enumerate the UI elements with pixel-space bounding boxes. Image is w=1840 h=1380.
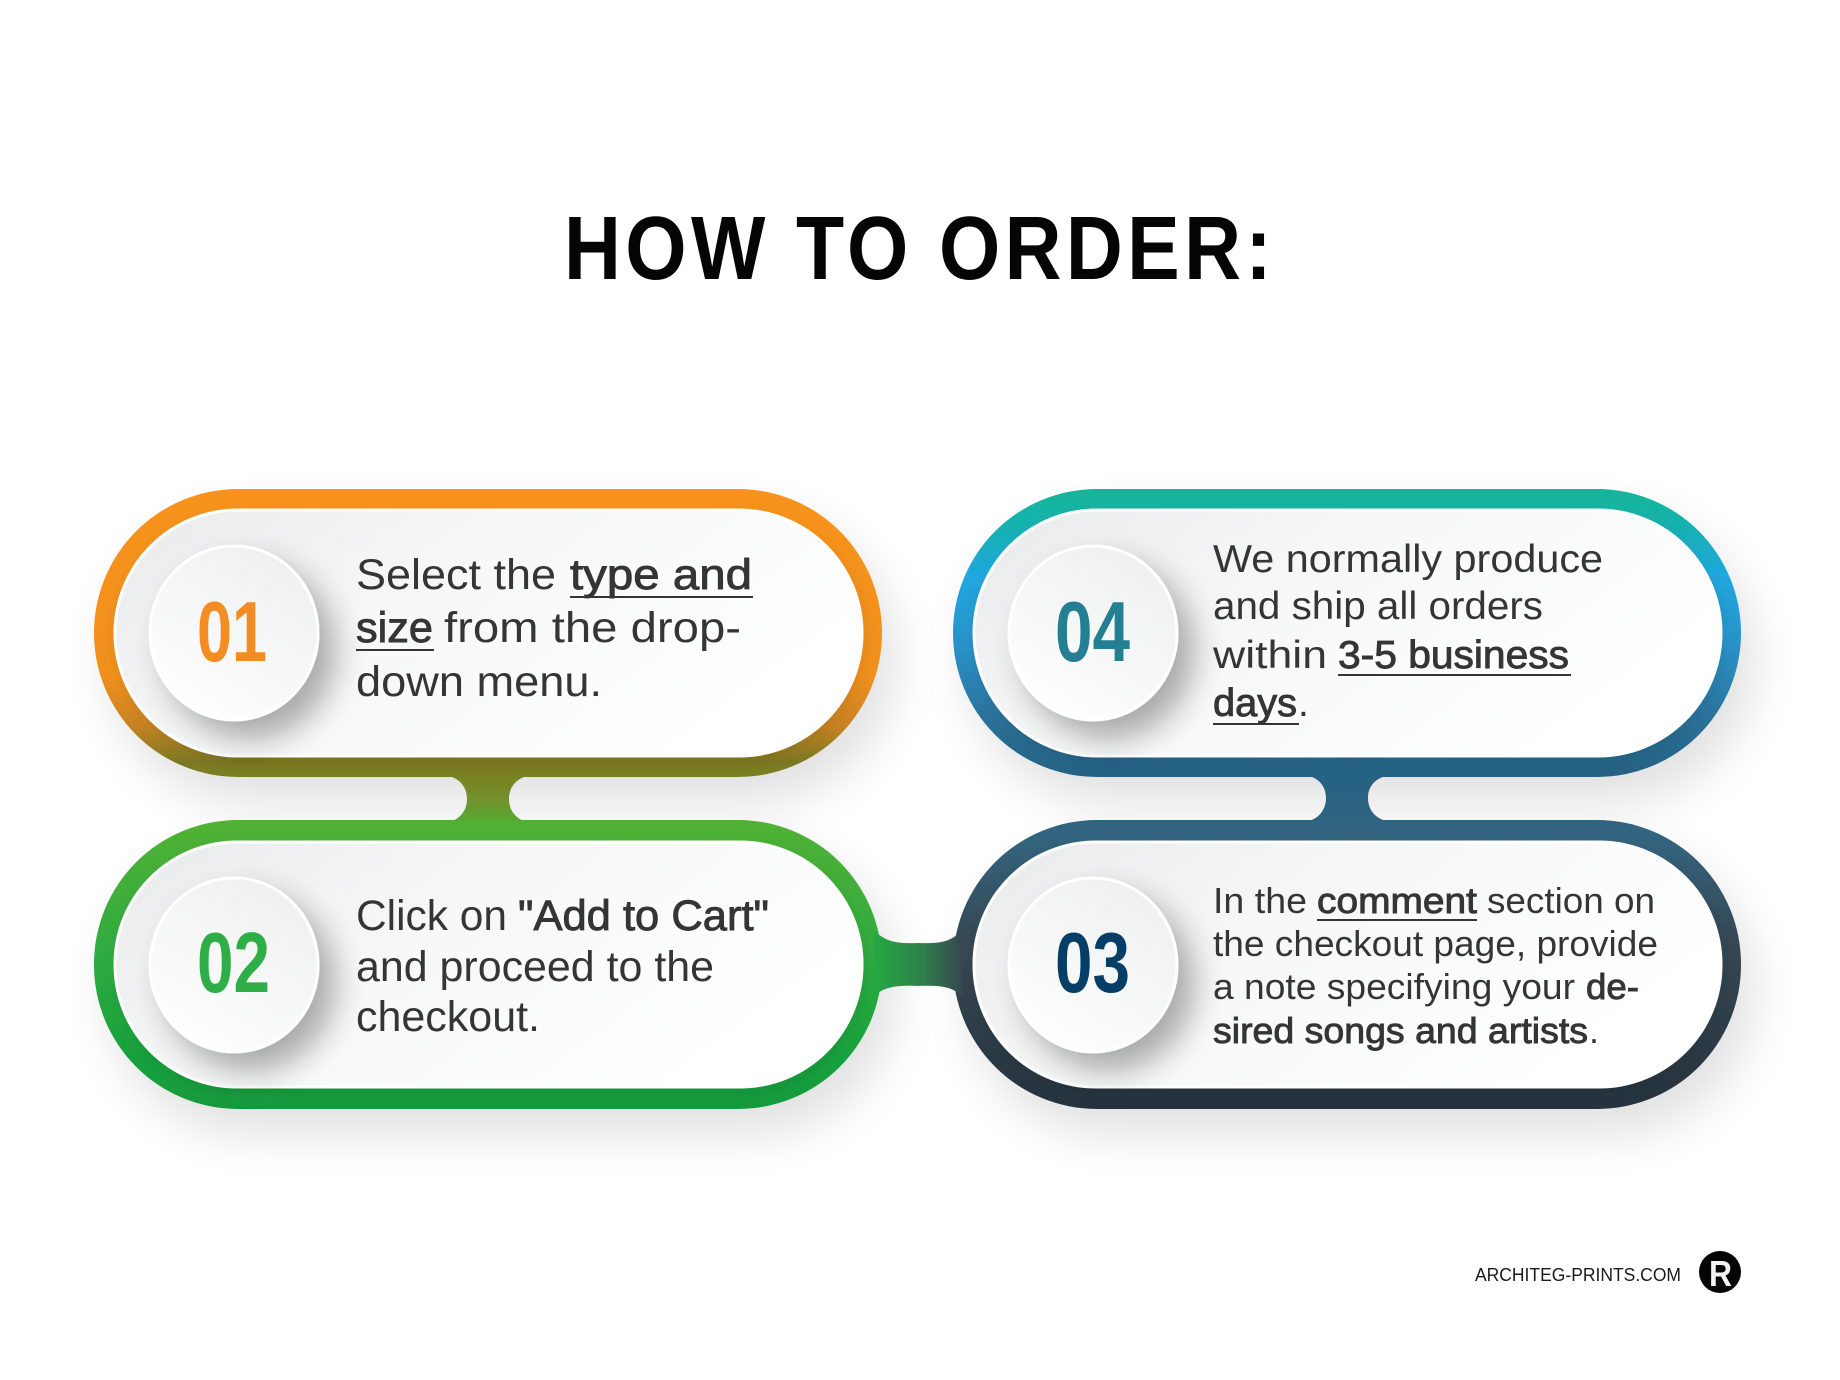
connector: step 04 to step 03 (1300, 775, 1396, 822)
step 03 outer ring (953, 820, 1741, 1109)
step 03 inner card (974, 842, 1721, 1087)
step 01 text (356, 551, 753, 706)
panel: step 03 (953, 820, 1741, 1109)
panel: step 02 (94, 820, 882, 1109)
step 01 outer ring (94, 489, 882, 777)
step 02 text: Click on (356, 892, 507, 940)
step 02 text: "Add to Cart" (518, 892, 769, 940)
step 03 text: the checkout page, provide (1213, 923, 1658, 964)
step 04 inner card (974, 510, 1721, 756)
footer website: ARCHITEG-PRINTS.COM (1475, 1265, 1681, 1285)
connector: step 02 to step 03 (874, 930, 962, 996)
step 01 text: Select the (356, 551, 556, 599)
step 02 inner card (115, 842, 862, 1087)
connector: step 01 to step 02 (440, 775, 536, 823)
step 03 text (1213, 880, 1658, 1051)
step 03 text: comment (1317, 880, 1477, 921)
step 01 inner card (115, 510, 862, 756)
step 04 text: within (1212, 634, 1327, 677)
step 02 number badge (150, 878, 318, 1052)
step 01 text: size (356, 604, 433, 652)
step 02 outer ring (94, 820, 882, 1109)
icon: logo badge (1699, 1251, 1741, 1294)
step 01 text: from the drop- (444, 604, 741, 652)
step 03 text: a note specifying your (1213, 966, 1575, 1007)
step 03 text: In the (1213, 880, 1307, 921)
step 01 text: type and (570, 551, 752, 599)
step 04 text: and ship all orders (1213, 585, 1543, 628)
step 03 number badge (1009, 878, 1177, 1052)
step 02 text: checkout. (356, 993, 540, 1041)
step 01 number badge (150, 546, 318, 720)
step 03 text: . (1589, 1010, 1599, 1051)
step 04 outer ring (953, 489, 1741, 777)
step 04 text: We normally produce (1213, 538, 1603, 581)
step 01 number badge: 01 (197, 585, 267, 680)
step 03 number badge: 03 (1055, 916, 1130, 1011)
step 04 number badge (1009, 546, 1177, 720)
title: HOW TO ORDER: (564, 199, 1276, 299)
step 02 text (356, 892, 769, 1041)
panel: step 04 (953, 489, 1741, 777)
step 04 number badge: 04 (1055, 585, 1130, 680)
step 03 text: section on (1487, 880, 1655, 921)
icon: logo badge: R (1709, 1253, 1732, 1294)
panel: step 01 (94, 489, 882, 777)
step 01 text: down menu. (356, 658, 602, 706)
step 04 text: days (1213, 682, 1297, 725)
step 02 number badge: 02 (197, 916, 270, 1011)
step 04 text (1212, 538, 1603, 725)
step 04 text: . (1298, 682, 1309, 725)
step 04 text: 3-5 business (1338, 634, 1569, 677)
step 03 text: sired songs and artists (1213, 1010, 1588, 1051)
step 03 text: de- (1586, 966, 1639, 1007)
step 02 text: and proceed to the (356, 943, 714, 991)
